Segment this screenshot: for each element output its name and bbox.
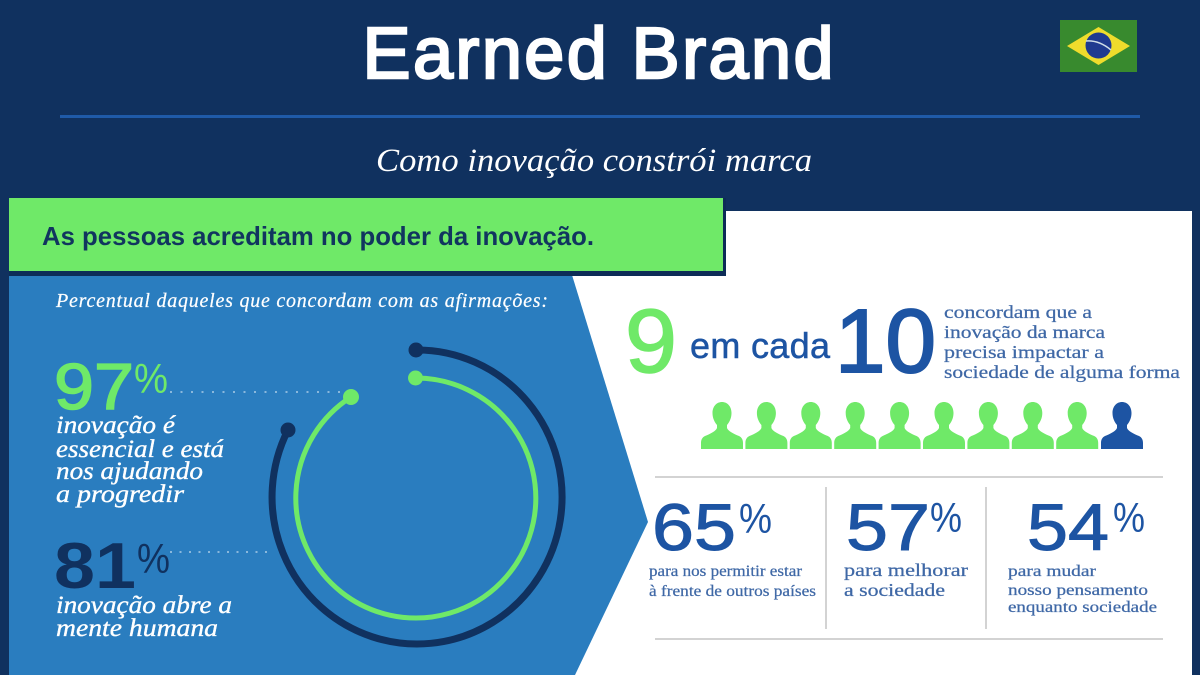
stat: 57%: % <box>930 494 962 541</box>
stat: 81%: % <box>137 535 170 582</box>
stat: 65%: 65 <box>652 490 736 564</box>
title: Earned Brand <box>362 14 834 94</box>
stat: 65%: % <box>739 495 772 542</box>
stat: 97%: 97 <box>54 350 134 423</box>
text: concordam: concordam que a <box>944 302 1092 322</box>
text: concordam: sociedade de alguma forma <box>944 362 1180 382</box>
headline: 9 em cada 10 <box>625 292 936 392</box>
headline: 9 em cada 10: em cada <box>690 325 831 366</box>
panel: blue arrow <box>9 275 648 675</box>
label: 97%: nos ajudando <box>56 458 203 485</box>
caption: 57% <box>844 560 968 600</box>
caption: 54%: enquanto sociedade <box>1008 599 1157 616</box>
caption: 57%: para melhorar <box>844 560 968 580</box>
text: concordam <box>944 302 1180 382</box>
stat: 57%: 57 <box>846 490 930 564</box>
caption: 65% <box>649 563 816 600</box>
label: 81%: inovação abre a <box>56 592 232 619</box>
caption: 65%: para nos permitir estar <box>649 563 803 580</box>
stat: 57% <box>844 490 968 600</box>
stat: 54%: 54 <box>1027 490 1109 564</box>
icons: people 9 of 10 <box>701 402 1143 449</box>
stat: 81% <box>54 529 232 642</box>
ring: 97% <box>296 378 536 618</box>
label: 81% <box>56 592 232 642</box>
subtitle: Como inovação constrói marca <box>376 143 812 179</box>
headline: 9 em cada 10: 9 <box>625 292 677 392</box>
label: 97%: inovação é <box>56 412 176 439</box>
text: concordam: inovação da marca <box>944 322 1105 342</box>
headline: 9 em cada 10: 10 <box>835 292 936 392</box>
intro text: Percentual daqueles que concordam com as afirmações: <box>55 290 548 312</box>
stat: 54%: % <box>1113 494 1145 541</box>
panel: white background <box>9 211 1192 675</box>
caption: 54%: nosso pensamento <box>1008 582 1148 599</box>
caption: 54%: para mudar <box>1008 563 1097 580</box>
stat: 54% <box>1008 490 1157 616</box>
caption: 54% <box>1008 563 1157 616</box>
label: 81%: mente humana <box>56 615 218 642</box>
label: 97% <box>56 412 224 508</box>
caption: 65%: à frente de outros países <box>649 583 816 600</box>
stat: 81%: 81 <box>54 529 136 602</box>
caption: 57%: a sociedade <box>844 580 945 600</box>
icon: Brazil flag <box>1060 20 1137 72</box>
stat: 97%: % <box>134 355 168 402</box>
text: concordam: precisa impactar a <box>944 342 1104 362</box>
stat: 97% <box>54 350 224 508</box>
label: 97%: essencial e está <box>56 436 224 463</box>
banner <box>9 198 726 276</box>
chart: concentric progress rings <box>272 342 562 644</box>
ring: 81% <box>272 350 562 644</box>
label: 97%: a progredir <box>56 481 184 508</box>
banner heading: As pessoas acreditam no poder da inovação. <box>42 221 594 251</box>
stat: 65% <box>649 490 816 600</box>
